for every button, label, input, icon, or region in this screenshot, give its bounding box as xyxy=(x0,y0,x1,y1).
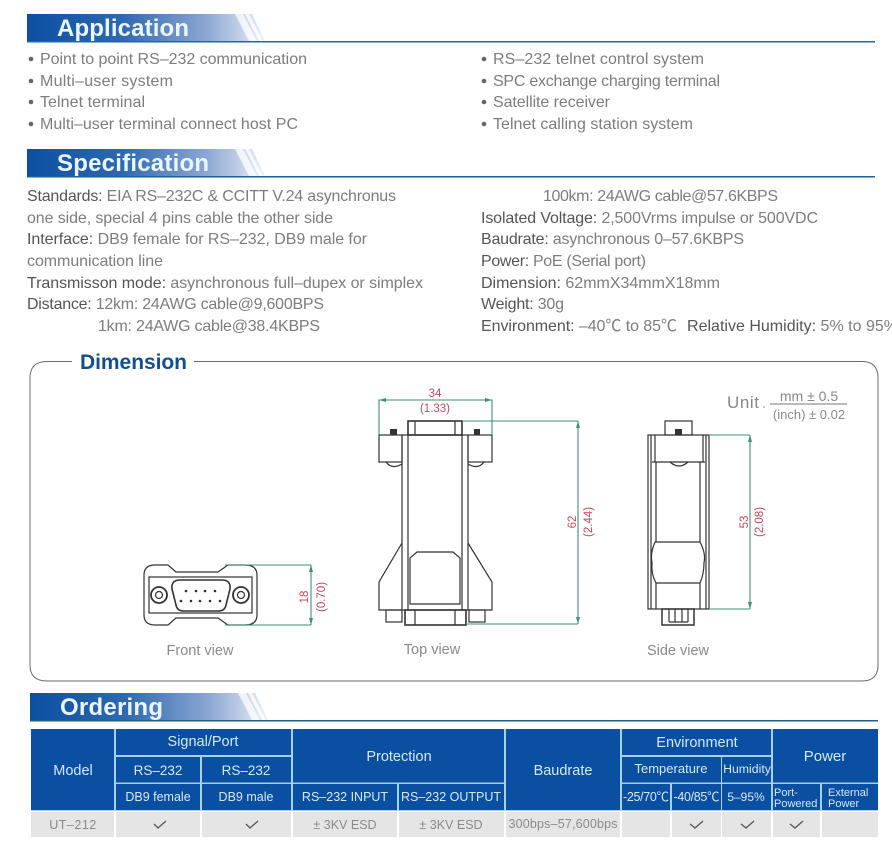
table data row: UT-212: 300bps–57,600bps xyxy=(508,817,618,831)
application list: left column xyxy=(29,51,307,133)
specification text: left column: one side, special 4 pins cable the other side xyxy=(27,210,333,227)
specification text: left column: Transmisson mode: asynchronous full–dupex or simplex xyxy=(27,275,423,292)
section header: Specification xyxy=(27,149,875,178)
table header labels: Signal/Port xyxy=(168,734,238,750)
drawing: front view: 18 xyxy=(299,591,311,603)
specification text: right column xyxy=(481,188,892,335)
section header: Specification: Specification xyxy=(57,150,209,177)
table header labels: Port- xyxy=(774,787,798,799)
application list: left column: Point to point RS–232 communication xyxy=(40,51,307,68)
drawing: top view: 62 xyxy=(567,516,579,528)
table header labels: RS–232 xyxy=(134,763,182,778)
section header: Ordering xyxy=(30,693,878,722)
table header labels: External xyxy=(828,787,868,799)
drawing: side view: Side view xyxy=(647,643,710,659)
table data row: UT-212: ± 3KV ESD xyxy=(313,818,377,832)
table header labels: RS–232 INPUT xyxy=(302,790,388,804)
drawing: front view: (0.70) xyxy=(316,582,328,612)
unit note: mm ± 0.5 xyxy=(780,388,838,404)
table header labels: Protection xyxy=(366,749,432,765)
specification text: left column: Distance: 12km: 24AWG cable@9,600BPS xyxy=(27,296,324,313)
table header labels: RS–232 OUTPUT xyxy=(401,790,501,804)
application list: left column: Multi–user system xyxy=(40,73,173,90)
table header labels: Humidity xyxy=(723,762,772,776)
drawing: front view xyxy=(144,565,328,659)
application list: right column xyxy=(482,51,720,133)
table header labels: -25/70℃ xyxy=(623,790,669,804)
table header labels: Powered xyxy=(774,798,817,810)
heading: Dimension: Dimension xyxy=(80,351,187,374)
drawing: top view: (1.33) xyxy=(420,403,450,415)
specification text: left column: 1km: 24AWG cable@38.4KBPS xyxy=(98,318,320,335)
specification text: right column: Isolated Voltage: 2,500Vrms impulse or 500VDC xyxy=(481,210,818,227)
table header labels: DB9 male xyxy=(219,790,273,804)
ordering table xyxy=(31,729,878,837)
specification text: right column: Environment: –40℃ to 85℃ xyxy=(481,318,677,335)
table header labels xyxy=(53,734,868,810)
panel: dimension xyxy=(30,351,878,681)
drawing: front view: Front view xyxy=(167,643,234,659)
table header labels: Power xyxy=(828,798,860,810)
specification text: left column: Interface: DB9 female for RS–232, DB9 male for xyxy=(27,231,368,248)
table data row: UT-212: ± 3KV ESD xyxy=(419,818,483,832)
specification text: right column: Power: PoE (Serial port) xyxy=(481,253,646,270)
section header: Application: Application xyxy=(57,15,189,42)
table header labels: 5–95% xyxy=(727,790,765,804)
table header labels: Baudrate xyxy=(534,763,592,779)
drawing: top view: (2.44) xyxy=(583,507,595,537)
specification text: right column: Baudrate: asynchronous 0–57.6KBPS xyxy=(481,231,744,248)
unit note xyxy=(727,388,847,422)
drawing: side view: (2.08) xyxy=(754,507,766,537)
drawing: top view: Top view xyxy=(404,642,461,658)
specification text: right column: Relative Humidity: 5% to 95% xyxy=(687,318,892,335)
table data row: UT-212 xyxy=(31,812,878,837)
drawing: side view: 53 xyxy=(739,516,751,528)
table header labels: Model xyxy=(53,763,93,779)
application list: right column: Satellite receiver xyxy=(493,94,611,111)
drawing: side view xyxy=(647,421,766,659)
application list: left column: Telnet terminal xyxy=(40,94,145,111)
specification text: right column: 100km: 24AWG cable@57.6KBPS xyxy=(543,188,778,205)
specification text: right column: Dimension: 62mmX34mmX18mm xyxy=(481,275,720,292)
section header: Application xyxy=(27,14,875,42)
table header labels: Environment xyxy=(656,735,738,751)
application list: right column: SPC exchange charging terminal xyxy=(493,73,720,90)
drawing: top view: 34 xyxy=(429,388,442,400)
specification text: left column: communication line xyxy=(27,253,163,270)
application list: right column: RS–232 telnet control system xyxy=(493,51,704,68)
table header labels: DB9 female xyxy=(125,790,191,804)
application list: right column: Telnet calling station system xyxy=(493,116,693,133)
section header: Ordering: Ordering xyxy=(60,694,163,721)
unit note: Unit xyxy=(727,393,759,412)
table data row: UT-212: UT–212 xyxy=(49,818,97,832)
drawing: top view xyxy=(379,388,595,658)
application list: left column: Multi–user terminal connect host PC xyxy=(40,116,298,133)
unit note: (inch) ± 0.02 xyxy=(773,407,845,422)
table header labels: Temperature xyxy=(635,761,707,776)
specification text: left column xyxy=(27,188,423,335)
table header labels: -40/85℃ xyxy=(674,790,720,804)
specification text: left column: Standards: EIA RS–232C & CCITT V.24 asynchronus xyxy=(27,188,396,205)
specification text: right column: Weight: 30g xyxy=(481,296,564,313)
table header labels: Power xyxy=(804,748,846,765)
table header labels: RS–232 xyxy=(222,763,270,778)
